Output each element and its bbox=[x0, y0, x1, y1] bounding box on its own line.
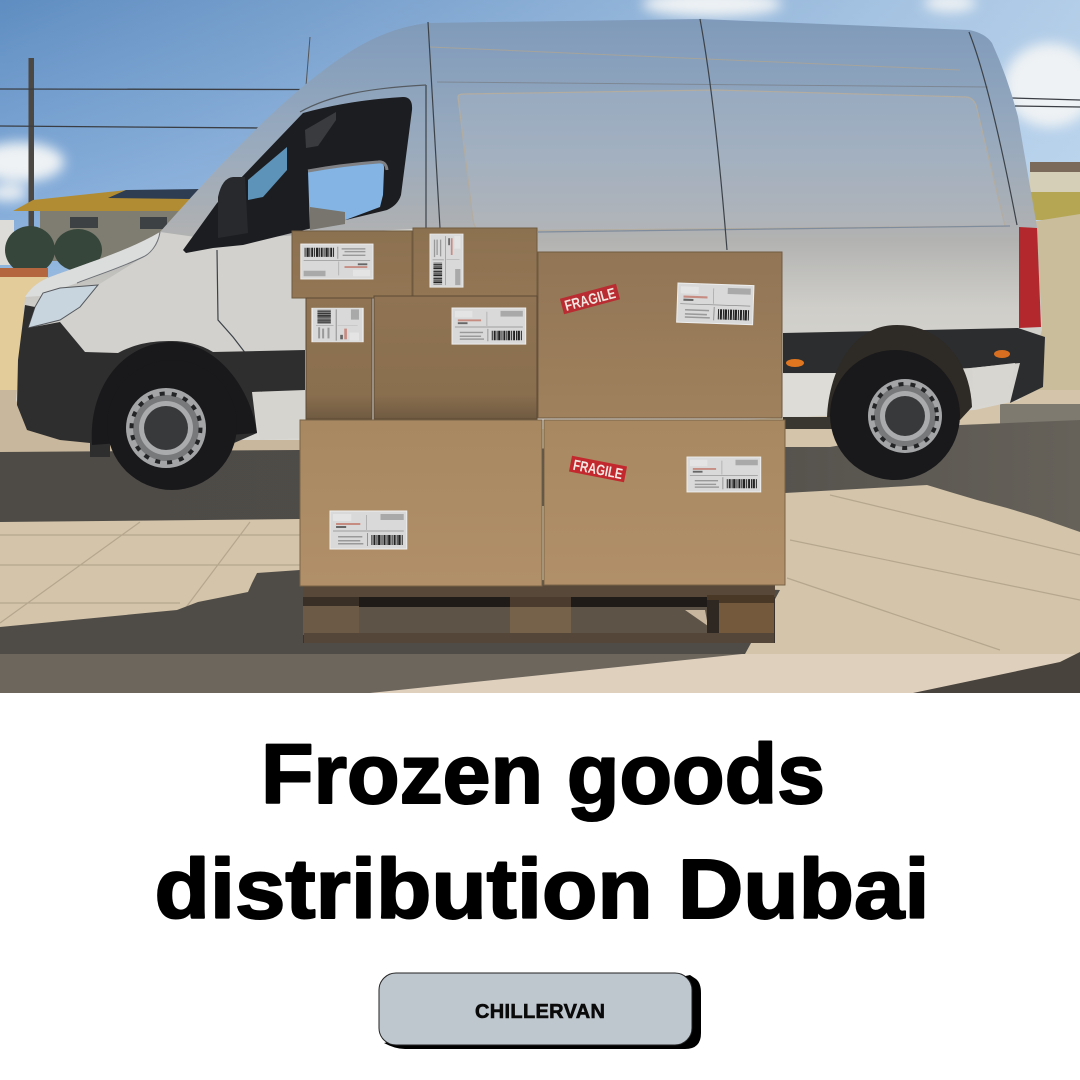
stacked boxes on pallet bbox=[292, 228, 785, 643]
long pallet shadow bbox=[0, 570, 780, 654]
white caption area bbox=[0, 693, 1080, 1080]
fragile sticker lower: FRAGILE bbox=[572, 457, 624, 483]
headlight bbox=[28, 285, 98, 328]
side markers bbox=[786, 359, 804, 367]
side mirror bbox=[218, 177, 248, 238]
button label: CHILLERVAN bbox=[475, 1001, 605, 1023]
box: top left bbox=[292, 231, 412, 298]
rear lower panels bbox=[783, 373, 837, 417]
front wheel bbox=[107, 360, 237, 490]
button face bbox=[379, 973, 692, 1045]
windows bbox=[183, 97, 412, 253]
fragile sticker lower bbox=[569, 456, 627, 484]
panel: photo of van and boxes bbox=[0, 0, 1080, 693]
title: Frozen goods bbox=[261, 727, 825, 821]
box: lower left bbox=[300, 420, 542, 586]
utility pole and wires bbox=[0, 37, 1080, 273]
paving joints bbox=[0, 495, 1080, 650]
hood bbox=[25, 232, 160, 297]
front door and fender highlight bbox=[60, 228, 440, 352]
ground bbox=[0, 390, 1080, 693]
rear wheel bbox=[830, 350, 960, 480]
box: narrow bbox=[306, 298, 372, 419]
front wheel arch bbox=[92, 342, 257, 445]
sky bbox=[0, 0, 1080, 400]
lower door trim bbox=[252, 390, 305, 440]
rear wheel arch bbox=[827, 325, 972, 420]
background house bbox=[0, 162, 1080, 416]
side panel recesses bbox=[458, 90, 1005, 231]
front bumper, side band and mudflap bbox=[17, 305, 305, 470]
van bbox=[16, 19, 1045, 470]
button shadow bbox=[384, 975, 701, 1049]
button: CHILLERVAN bbox=[379, 973, 701, 1049]
title: distribution Dubai bbox=[154, 842, 930, 936]
fragile sticker upper: FRAGILE bbox=[563, 285, 618, 315]
title bbox=[154, 727, 930, 936]
box: top middle bbox=[413, 228, 537, 296]
box: upper right bbox=[538, 252, 782, 418]
roof creases bbox=[437, 82, 988, 87]
rear band bbox=[783, 328, 1045, 403]
shipping labels bbox=[301, 234, 761, 549]
ground shadow under van bbox=[0, 420, 1080, 532]
door seams bbox=[217, 19, 1017, 430]
box: lower right bbox=[544, 420, 785, 585]
van body bbox=[16, 19, 1042, 440]
tail light bbox=[1019, 227, 1041, 328]
clouds bbox=[0, 0, 1080, 201]
box: middle bbox=[374, 296, 537, 419]
pavement strip bbox=[0, 654, 1080, 693]
wooden pallet bbox=[303, 585, 775, 643]
